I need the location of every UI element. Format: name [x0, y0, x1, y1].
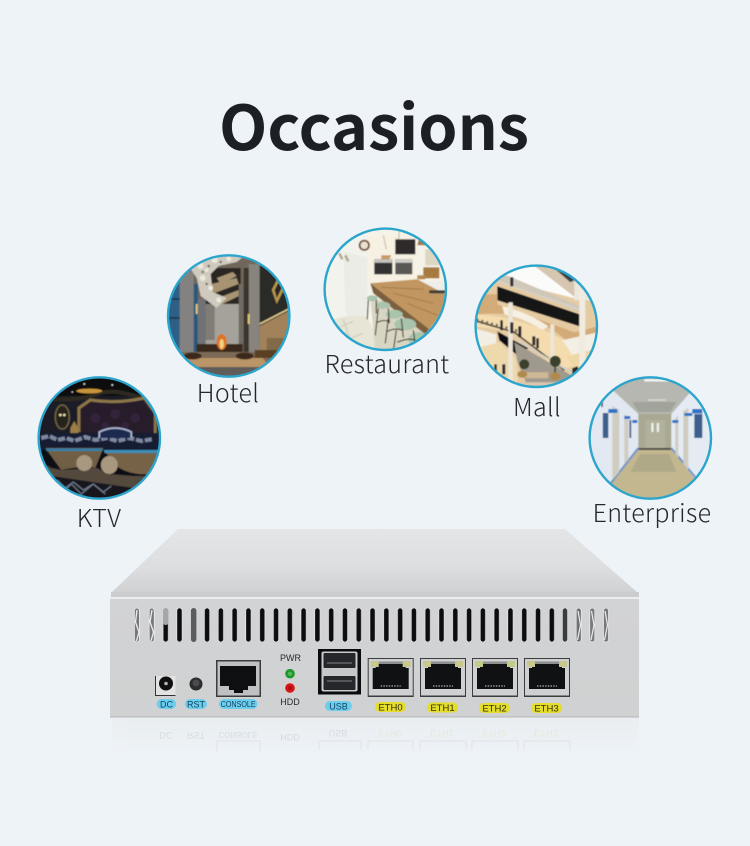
- label: Hotel: Hotel: [197, 374, 259, 410]
- tag: ETH3: ETH3: [534, 703, 559, 714]
- scene: Enterprise: [588, 376, 712, 500]
- appliance reflection: ETH2: [482, 727, 506, 738]
- appliance reflection: [112, 718, 639, 754]
- tag: RST: RST: [187, 699, 206, 709]
- label: KTV: KTV: [77, 499, 121, 535]
- appliance reflection: RST: [187, 730, 206, 740]
- ETH0 port: [368, 658, 414, 697]
- ETH1 port: [420, 658, 466, 697]
- label: Enterprise: Enterprise: [593, 494, 711, 530]
- appliance reflection: ETH3: [534, 727, 558, 738]
- appliance front face: [110, 597, 639, 717]
- tag: ETH1: ETH1: [430, 703, 455, 714]
- scene: Hotel: [167, 254, 291, 378]
- tag: USB: USB: [329, 701, 348, 711]
- label: Mall: Mall: [513, 388, 561, 424]
- appliance reflection: DC: [160, 730, 173, 740]
- scene: Restaurant: [323, 227, 447, 351]
- product: network appliance: [110, 529, 639, 754]
- vent slots: [134, 608, 608, 642]
- label: Restaurant: Restaurant: [325, 345, 449, 381]
- ETH2 port: [472, 658, 518, 697]
- tag: DC: [157, 699, 176, 709]
- title: Occasions: [219, 78, 529, 168]
- appliance reflection: USB: [329, 728, 347, 738]
- tag: DC: DC: [160, 699, 173, 709]
- tag: ETH0: ETH0: [378, 702, 403, 713]
- RST button: [190, 678, 202, 690]
- tag: CONSOLE: CONSOLE: [221, 700, 256, 709]
- scene: KTV: [37, 376, 161, 500]
- LED indicators: [280, 653, 301, 707]
- appliance reflection: ETH0: [378, 727, 402, 738]
- LED indicators: PWR: [280, 653, 301, 663]
- LED indicators: HDD: [280, 697, 300, 707]
- appliance top face: [112, 529, 637, 592]
- ETH3 port: [524, 658, 570, 697]
- appliance reflection: CONSOLE: [218, 730, 258, 739]
- DC jack: [156, 676, 176, 696]
- CONSOLE port: [216, 660, 261, 697]
- scene: Mall: [474, 264, 598, 388]
- USB ports: [318, 649, 361, 694]
- appliance reflection: HDD: [280, 732, 300, 742]
- appliance lip: [111, 592, 639, 597]
- appliance reflection: ETH1: [430, 727, 454, 738]
- tag: ETH2: ETH2: [482, 703, 507, 714]
- tag: USB: [325, 701, 352, 711]
